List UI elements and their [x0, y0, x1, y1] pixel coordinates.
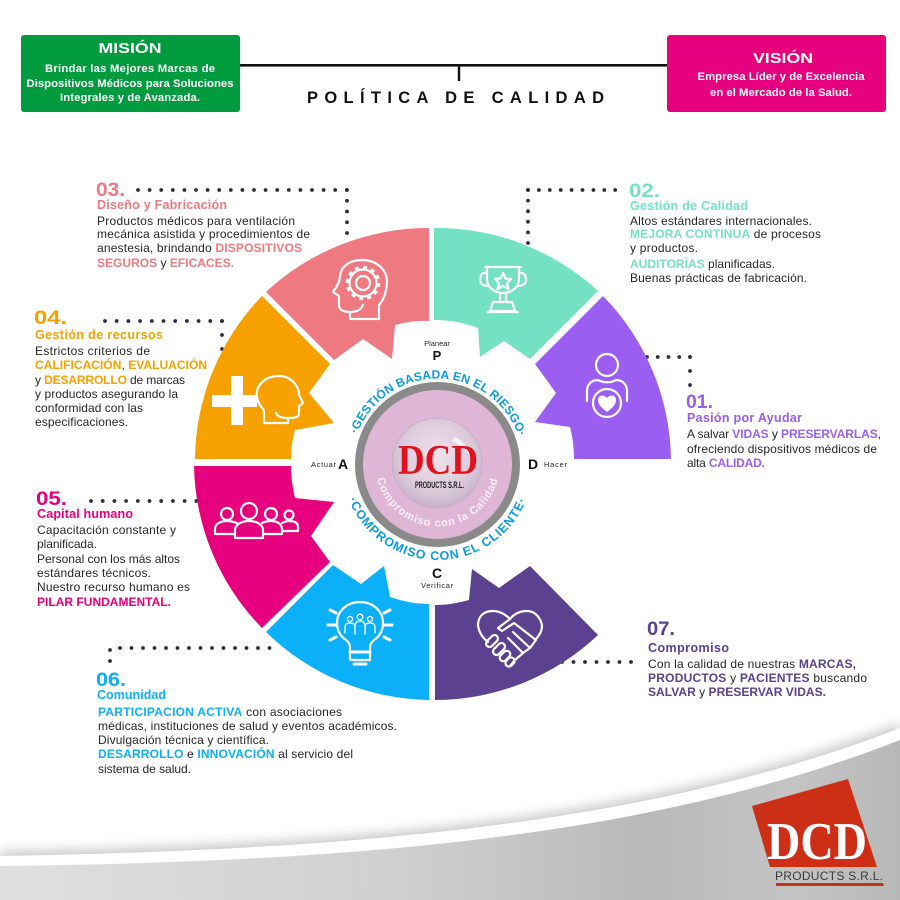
text block: 01: alta CALIDAD. — [687, 456, 765, 470]
text block: 06: PARTICIPACION ACTIVA con asociaciones — [98, 705, 342, 719]
center gear labels: D — [528, 456, 538, 472]
text block: 07 — [647, 619, 867, 699]
text block: 05: planificada. — [37, 537, 97, 551]
segment: 07 compromiso — [435, 566, 598, 700]
text block: 02: Gestión de Calidad — [630, 199, 748, 213]
text block: 02: Buenas prácticas de fabricación. — [630, 271, 807, 285]
center gear labels — [311, 339, 568, 590]
text block: 01: 01. — [686, 392, 713, 413]
segment: 05 capital humano — [194, 466, 334, 628]
text block: 03 — [96, 180, 310, 270]
text block: 01 — [686, 392, 881, 470]
text block: 04: 04. — [34, 308, 67, 329]
text block: 04: y productos asegurando la — [35, 387, 178, 401]
segment: 06 comunidad — [266, 565, 429, 700]
text block: 03: SEGUROS y EFICACES. — [97, 256, 234, 270]
panel: misión: Integrales y de Avanzada. — [60, 92, 200, 104]
center emblem: PRODUCTS S.R.L. — [415, 480, 464, 490]
icon: plus and head — [212, 376, 303, 425]
text block: 07: 07. — [647, 619, 675, 640]
text block: 02: y productos. — [630, 241, 698, 255]
icon: group of people — [215, 503, 298, 538]
text block: 04: CALIFICACIÓN, EVALUACIÓN — [35, 357, 207, 372]
panel: misión: MISIÓN — [98, 39, 162, 57]
text block: 02: 02. — [629, 181, 660, 202]
logo: DCD Products: DCD — [767, 813, 867, 871]
text block: 04: especificaciones. — [35, 415, 128, 429]
text block: 05: estándares técnicos. — [37, 566, 151, 580]
title: POLÍTICA DE CALIDAD — [307, 88, 604, 107]
text block: 04 — [34, 308, 207, 429]
center emblem: DCD — [398, 438, 478, 484]
text block: 06 — [96, 670, 397, 776]
panel: visión: VISIÓN — [753, 49, 813, 67]
logo: DCD Products: PRODUCTS S.R.L. — [775, 869, 883, 883]
dotted connectors — [91, 190, 691, 662]
text block: 03: mecánica asistida y procedimientos de — [97, 227, 310, 241]
text block: 03: 03. — [96, 180, 125, 201]
text block: 03: Productos médicos para ventilación — [97, 214, 295, 228]
text block: 03: Diseño y Fabricación — [97, 198, 227, 212]
text block: 02: Altos estándares internacionales. — [630, 214, 812, 228]
text block: 07: Compromiso — [648, 641, 729, 655]
center gear labels: Planear — [424, 339, 450, 348]
center gear labels: P — [433, 348, 442, 363]
text block: 02: MEJORA CONTINUA de procesos — [630, 227, 821, 241]
text block: 05: Capacitación constante y — [37, 523, 176, 537]
text block: 05: PILAR FUNDAMENTAL. — [37, 595, 171, 609]
text block: 07: Con la calidad de nuestras MARCAS, — [648, 657, 856, 671]
segment: 03 diseño y fabricación — [266, 228, 429, 360]
text block: 01: ofreciendo dispositivos médicos de — [687, 442, 877, 456]
center gear labels: Hacer — [544, 460, 568, 469]
background swoosh — [0, 724, 900, 900]
center gear labels: C — [432, 565, 442, 581]
text block: 05: Capital humano — [37, 507, 133, 521]
icon: person with heart — [587, 354, 627, 417]
panel: visión — [667, 35, 886, 112]
text block: 04: conformidad con las — [35, 401, 143, 415]
text block: 04: Gestión de recursos — [35, 328, 163, 342]
text block: 06: 06. — [96, 670, 126, 691]
panel: visión: Empresa Líder y de Excelencia — [698, 71, 865, 83]
text block: 02: AUDITORÍAS planificadas. — [630, 256, 775, 271]
text block: 05: 05. — [36, 489, 67, 510]
text block: 06: Divulgación técnica y científica. — [98, 733, 269, 747]
panel: misión — [21, 35, 240, 112]
text block: 05: Nuestro recurso humano es — [37, 580, 190, 594]
icon: trophy — [480, 267, 526, 312]
text block: 03: anestesia, brindando DISPOSITIVOS — [97, 241, 302, 255]
text block: 07: PRODUCTOS y PACIENTES buscando — [648, 671, 867, 685]
text block: 04: y DESARROLLO de marcas — [35, 373, 185, 387]
text block: 07: SALVAR y PRESERVAR VIDAS. — [648, 685, 826, 699]
icon: light bulb with people — [328, 602, 392, 664]
center gear labels: A — [338, 456, 348, 472]
segment: 01 pasión por ayudar — [535, 296, 671, 459]
center gear labels: Verificar — [421, 581, 454, 590]
text block: 05 — [36, 489, 190, 609]
text block: 01: Pasión por Ayudar — [687, 411, 802, 425]
connector line between mission and vision — [240, 64, 667, 81]
panel: misión: Brindar las Mejores Marcas de — [45, 63, 215, 75]
text block: 01: A salvar VIDAS y PRESERVARLAS, — [687, 427, 881, 441]
segment: 04 gestión de recursos — [195, 296, 334, 459]
logo: DCD Products — [752, 779, 884, 886]
icon: head with gear — [333, 260, 387, 319]
segment: 02 gestión de calidad — [434, 228, 598, 359]
center emblem: ·GESTIÓN BASADA EN EL RIESGO· — [352, 370, 524, 434]
text block: 06: médicas, instituciones de salud y eventos académicos. — [98, 719, 397, 733]
panel: visión: en el Mercado de la Salud. — [710, 87, 852, 99]
text block: 06: Comunidad — [97, 688, 166, 702]
text block: 06: DESARROLLO e INNOVACIÓN al servicio del — [98, 746, 353, 761]
center emblem: Compromiso con la Calidad — [378, 478, 498, 527]
center emblem — [352, 370, 524, 560]
center gear labels: Actuar — [311, 460, 336, 469]
icon: handshake heart — [478, 611, 542, 668]
text block: 02 — [629, 181, 821, 285]
center emblem: ·COMPROMISO CON EL CLIENTE· — [352, 498, 524, 560]
text block: 06: sistema de salud. — [98, 762, 191, 776]
text block: 04: Estrictos criterios de — [35, 344, 150, 358]
text block: 05: Personal con los más altos — [37, 552, 180, 566]
panel: misión: Dispositivos Médicos para Soluciones — [26, 78, 234, 90]
